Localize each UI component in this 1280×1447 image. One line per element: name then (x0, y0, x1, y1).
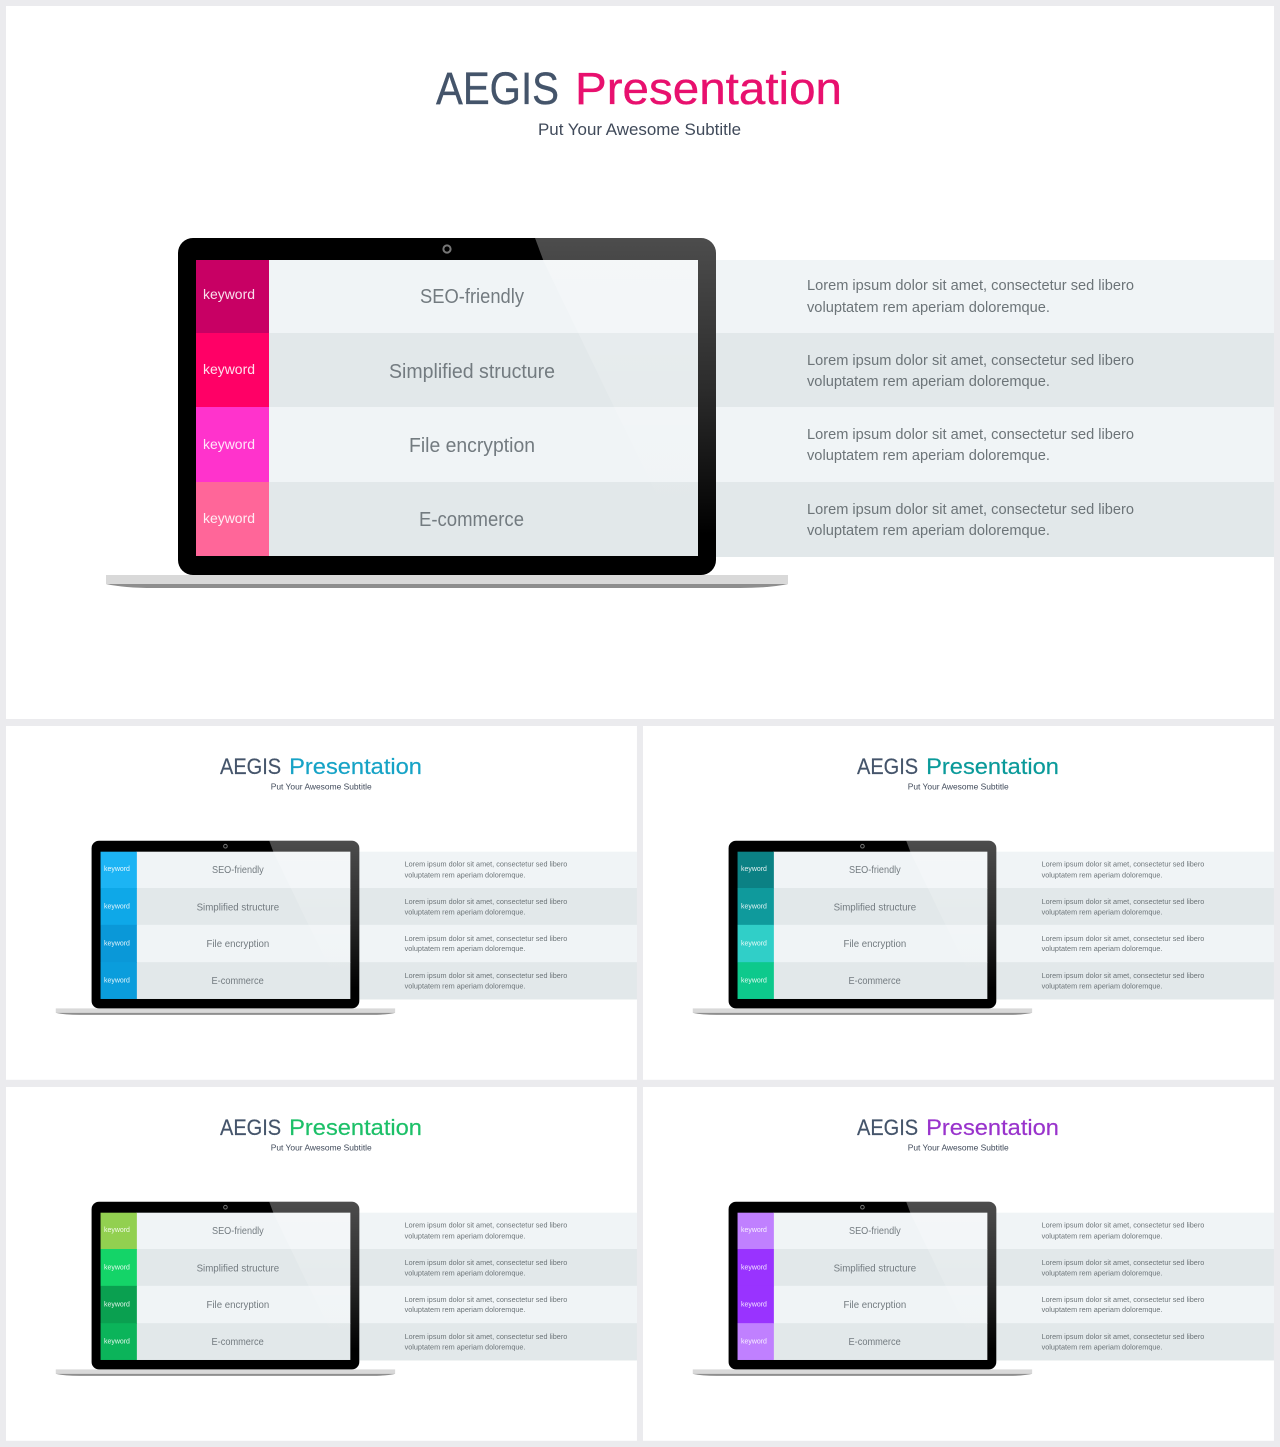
panel: purple slide (643, 1087, 1274, 1441)
description text: Lorem ipsum dolor sit amet, consectetur sed libero (1042, 971, 1204, 980)
laptop: E-commerce (212, 976, 264, 987)
panel: blue slide (6, 726, 637, 1080)
subtitle: Put Your Awesome Subtitle (271, 781, 372, 791)
laptop: Simplified structure (197, 902, 280, 913)
description text: voluptatem rem aperiam doloremque. (1042, 944, 1162, 953)
title: Presentation (289, 1115, 422, 1140)
laptop: keyword (203, 510, 255, 526)
laptop: File encryption (844, 1300, 906, 1311)
laptop: keyword (104, 1227, 130, 1234)
description text (405, 860, 567, 991)
laptop: keyword (104, 941, 130, 948)
laptop: File encryption (207, 1300, 269, 1311)
description text: voluptatem rem aperiam doloremque. (1042, 1343, 1162, 1352)
laptop: keyword (741, 866, 767, 873)
laptop: Simplified structure (197, 1263, 280, 1274)
description text: voluptatem rem aperiam doloremque. (405, 871, 525, 880)
description text: voluptatem rem aperiam doloremque. (405, 982, 525, 991)
laptop: keyword (741, 903, 767, 910)
description bands (988, 1213, 1274, 1360)
laptop: keyword (741, 1264, 767, 1271)
subtitle: Put Your Awesome Subtitle (271, 1142, 372, 1152)
laptop: File encryption (207, 939, 269, 950)
description text: voluptatem rem aperiam doloremque. (1042, 1268, 1162, 1277)
laptop: keyword (104, 1264, 130, 1271)
title: AEGIS (436, 63, 559, 114)
panel: green slide (6, 1087, 637, 1441)
description text: Lorem ipsum dolor sit amet, consectetur sed libero (1042, 1258, 1204, 1267)
description text: voluptatem rem aperiam doloremque. (405, 944, 525, 953)
description text: voluptatem rem aperiam doloremque. (807, 523, 1050, 539)
description text: Lorem ipsum dolor sit amet, consectetur sed libero (405, 1258, 567, 1267)
title: AEGIS (857, 754, 918, 779)
laptop (56, 841, 395, 1015)
description text: Lorem ipsum dolor sit amet, consectetur sed libero (405, 1221, 567, 1230)
laptop: SEO-friendly (420, 286, 524, 308)
description bands (988, 852, 1274, 999)
title (436, 63, 842, 114)
title: Presentation (289, 754, 422, 779)
description text: Lorem ipsum dolor sit amet, consectetur sed libero (1042, 934, 1204, 943)
subtitle: Put Your Awesome Subtitle (908, 1142, 1009, 1152)
description text: voluptatem rem aperiam doloremque. (1042, 1232, 1162, 1241)
laptop: keyword (104, 1302, 130, 1309)
laptop: Simplified structure (389, 361, 555, 383)
description text (405, 1221, 567, 1352)
description text: Lorem ipsum dolor sit amet, consectetur sed libero (405, 860, 567, 869)
description text: voluptatem rem aperiam doloremque. (1042, 871, 1162, 880)
description text: voluptatem rem aperiam doloremque. (1042, 1305, 1162, 1314)
laptop: SEO-friendly (212, 865, 264, 876)
description text: Lorem ipsum dolor sit amet, consectetur sed libero (405, 897, 567, 906)
laptop: keyword (104, 978, 130, 985)
laptop: E-commerce (849, 1337, 901, 1348)
laptop: keyword (741, 1302, 767, 1309)
description text: Lorem ipsum dolor sit amet, consectetur sed libero (405, 1332, 567, 1341)
description text: Lorem ipsum dolor sit amet, consectetur sed libero (807, 427, 1134, 443)
description bands (700, 260, 1274, 557)
laptop: Simplified structure (834, 902, 917, 913)
description text (807, 278, 1134, 539)
description text: Lorem ipsum dolor sit amet, consectetur sed libero (1042, 1221, 1204, 1230)
title (857, 1115, 1059, 1140)
description text: voluptatem rem aperiam doloremque. (807, 300, 1050, 316)
title: Presentation (575, 63, 842, 114)
description text: Lorem ipsum dolor sit amet, consectetur sed libero (1042, 897, 1204, 906)
laptop: SEO-friendly (849, 1226, 901, 1237)
laptop (56, 1202, 395, 1376)
description text: voluptatem rem aperiam doloremque. (1042, 907, 1162, 916)
title: AEGIS (857, 1115, 918, 1140)
title (220, 1115, 422, 1140)
description text (1042, 1221, 1204, 1352)
title: Presentation (926, 1115, 1059, 1140)
description text: voluptatem rem aperiam doloremque. (405, 1305, 525, 1314)
laptop: keyword (203, 436, 255, 452)
laptop (693, 841, 1032, 1015)
laptop: keyword (104, 866, 130, 873)
description text: Lorem ipsum dolor sit amet, consectetur sed libero (405, 971, 567, 980)
description text: Lorem ipsum dolor sit amet, consectetur sed libero (1042, 1295, 1204, 1304)
laptop: SEO-friendly (849, 865, 901, 876)
description text: voluptatem rem aperiam doloremque. (405, 1268, 525, 1277)
title: AEGIS (220, 754, 281, 779)
laptop: File encryption (844, 939, 906, 950)
description text: Lorem ipsum dolor sit amet, consectetur sed libero (807, 502, 1134, 518)
subtitle: Put Your Awesome Subtitle (908, 781, 1009, 791)
laptop: keyword (104, 1339, 130, 1346)
description text: voluptatem rem aperiam doloremque. (405, 1343, 525, 1352)
panel: large pink slide (6, 6, 1274, 719)
title (857, 754, 1059, 779)
description bands (351, 1213, 637, 1360)
laptop: keyword (741, 941, 767, 948)
laptop: File encryption (409, 435, 535, 457)
laptop (693, 1202, 1032, 1376)
laptop: keyword (203, 286, 255, 302)
description text: Lorem ipsum dolor sit amet, consectetur sed libero (1042, 1332, 1204, 1341)
description text: Lorem ipsum dolor sit amet, consectetur sed libero (405, 934, 567, 943)
description text: voluptatem rem aperiam doloremque. (405, 907, 525, 916)
title (220, 754, 422, 779)
laptop: E-commerce (849, 976, 901, 987)
subtitle: Put Your Awesome Subtitle (538, 120, 741, 139)
description text: voluptatem rem aperiam doloremque. (807, 374, 1050, 390)
laptop: keyword (203, 361, 255, 377)
title: AEGIS (220, 1115, 281, 1140)
laptop: E-commerce (212, 1337, 264, 1348)
description text: Lorem ipsum dolor sit amet, consectetur sed libero (807, 353, 1134, 369)
laptop (106, 238, 788, 588)
description text (1042, 860, 1204, 991)
description text: voluptatem rem aperiam doloremque. (1042, 982, 1162, 991)
laptop: keyword (741, 978, 767, 985)
laptop: keyword (741, 1227, 767, 1234)
laptop: keyword (741, 1339, 767, 1346)
title: Presentation (926, 754, 1059, 779)
description text: Lorem ipsum dolor sit amet, consectetur sed libero (807, 278, 1134, 294)
description text: voluptatem rem aperiam doloremque. (405, 1232, 525, 1241)
laptop: SEO-friendly (212, 1226, 264, 1237)
laptop: keyword (104, 903, 130, 910)
panel: teal slide (643, 726, 1274, 1080)
description text: Lorem ipsum dolor sit amet, consectetur sed libero (1042, 860, 1204, 869)
description bands (351, 852, 637, 999)
description text: Lorem ipsum dolor sit amet, consectetur sed libero (405, 1295, 567, 1304)
description text: voluptatem rem aperiam doloremque. (807, 448, 1050, 464)
laptop: Simplified structure (834, 1263, 917, 1274)
laptop: E-commerce (419, 509, 524, 531)
